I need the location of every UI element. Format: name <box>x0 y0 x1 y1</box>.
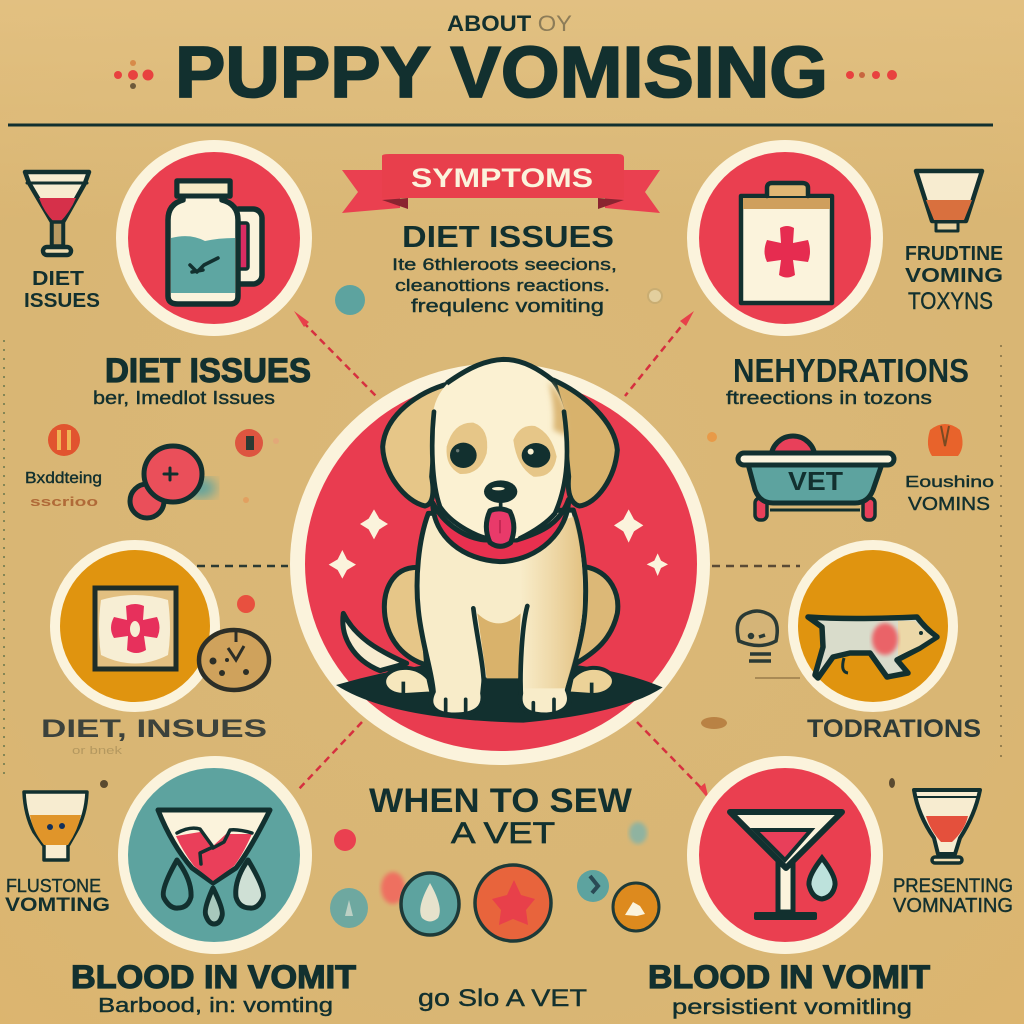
panel: jug top-left <box>116 140 312 336</box>
heading: when to see a vet: WHEN TO SEW <box>369 782 633 820</box>
icon: biscuit clock <box>199 630 269 690</box>
title: PUPPY VOMISING <box>175 33 828 113</box>
heading: blood in vomit left: Barbood, in: vomting <box>98 995 333 1017</box>
center text: diet issues <box>392 219 617 316</box>
label: diet insues: DIET, INSUES <box>41 715 267 743</box>
nose <box>484 480 517 503</box>
eyebrow text: ABOUT OY <box>447 11 572 36</box>
label: bottom-left small <box>5 876 110 916</box>
icon: vet bath: VET <box>788 466 843 496</box>
label: diet issues small left <box>24 268 100 312</box>
connector arrow tips <box>294 311 709 800</box>
label: bottom-right small: PRESENTING <box>893 876 1013 897</box>
smudge <box>701 717 727 729</box>
tongue <box>486 509 514 546</box>
title ornament left <box>114 60 154 89</box>
label: top right small: VOMING <box>905 265 1003 287</box>
label: diet issues small left: DIET <box>32 268 84 290</box>
heading: blood in vomit right <box>648 959 930 1019</box>
icon: glass top-right <box>916 171 982 231</box>
dot <box>237 595 255 613</box>
ribbon: symptoms <box>342 154 660 213</box>
icon: funnel and drops <box>158 810 270 924</box>
label: bottom-left small: VOMTING <box>5 895 110 916</box>
heading: dehydrations right: ftreections in tozons <box>726 388 932 408</box>
ribbon: symptoms: SYMPTOMS <box>411 163 593 193</box>
label: top right small: TOXYNS <box>908 288 993 315</box>
title ornament right <box>846 70 897 80</box>
icon: framed cross <box>95 588 176 669</box>
label: right small: Eoushino <box>905 474 994 491</box>
eyes <box>450 443 477 468</box>
icon: martini <box>730 812 842 920</box>
label: diet issues small left: ISSUES <box>24 290 100 312</box>
heading: dehydrations right <box>726 352 969 408</box>
icon: medical cross <box>764 226 810 278</box>
panel: cross orange left <box>50 540 220 712</box>
dot <box>889 778 895 788</box>
label: bottom-left small: FLUSTONE <box>6 876 101 896</box>
header rule <box>8 124 993 126</box>
center text: diet issues: cleanottions reactions. <box>395 276 610 295</box>
heading: diet issues left: DIET ISSUES <box>105 352 311 390</box>
small icons bottom center <box>330 822 659 941</box>
icon: glass bottom-left <box>24 792 87 860</box>
heading: diet issues left <box>93 352 311 408</box>
label: right small: VOMINS <box>908 494 990 514</box>
small icons left <box>48 424 279 503</box>
icon: dog <box>808 617 937 678</box>
label: right small <box>905 474 994 514</box>
illustration: puppy <box>329 359 668 723</box>
sparkles <box>329 509 668 579</box>
heading: blood in vomit right: persistient vomitling <box>672 996 912 1019</box>
label: bottom-right small: VOMNATING <box>893 895 1013 917</box>
heading: blood in vomit right: BLOOD IN VOMIT <box>648 959 930 995</box>
label: diet insues <box>41 715 267 757</box>
hind legs <box>384 567 427 665</box>
label: top right small <box>905 243 1003 315</box>
icon: jug <box>168 181 262 304</box>
icon: orange badge <box>613 883 659 931</box>
small icons right <box>707 424 963 456</box>
heading: dehydrations right: NEHYDRATIONS <box>733 352 969 389</box>
icon: teal drop <box>401 873 459 935</box>
icon: clipboard <box>741 183 832 303</box>
chest shade <box>477 613 521 678</box>
side dotted edge lines <box>4 340 1001 780</box>
head <box>431 360 568 540</box>
center text: diet issues: DIET ISSUES <box>402 219 614 254</box>
main circle: puppy <box>290 359 710 765</box>
label: left small: Bxddteing <box>25 470 102 487</box>
body <box>417 510 586 715</box>
center text: diet issues: frequlenc vomiting <box>411 296 604 316</box>
panel: blood funnel bottom-left <box>118 756 312 954</box>
ears behind <box>383 383 450 506</box>
label: todrations: TODRATIONS <box>807 715 981 743</box>
label: diet insues: or bnek <box>72 745 123 757</box>
center text: diet issues: Ite 6thleroots seecions, <box>392 255 617 274</box>
label: top right small: FRUDTINE <box>905 243 1003 265</box>
decorative dots top center <box>335 285 662 315</box>
icon: orange star <box>475 865 551 941</box>
icon: red blobs <box>130 446 216 518</box>
label: left small <box>25 470 102 509</box>
icon: glass bottom-right <box>914 790 980 863</box>
collar <box>433 499 569 562</box>
panel: dog orange right <box>788 540 958 712</box>
icon: bulb <box>737 611 800 678</box>
connectors <box>197 318 800 793</box>
text: go see a vet: go Slo A VET <box>418 985 587 1012</box>
heading: when to see a vet: A VET <box>451 817 555 850</box>
label: left small: sscrioo <box>30 494 98 509</box>
icon: vet bath <box>738 436 894 520</box>
heading: blood in vomit left: BLOOD IN VOMIT <box>71 959 356 995</box>
icon: glass top-left <box>25 172 89 255</box>
heading: diet issues left: ber, Imedlot Issues <box>93 388 275 408</box>
tail <box>343 613 407 671</box>
panel: clipboard top-right <box>687 140 883 336</box>
heading: blood in vomit left <box>71 959 356 1017</box>
dot <box>100 780 108 788</box>
floor shadow <box>336 660 663 723</box>
label: bottom-right small <box>893 876 1013 917</box>
eye patches <box>446 423 487 474</box>
panel: martini bottom-right <box>687 756 883 954</box>
heading: when to see a vet <box>369 782 633 850</box>
